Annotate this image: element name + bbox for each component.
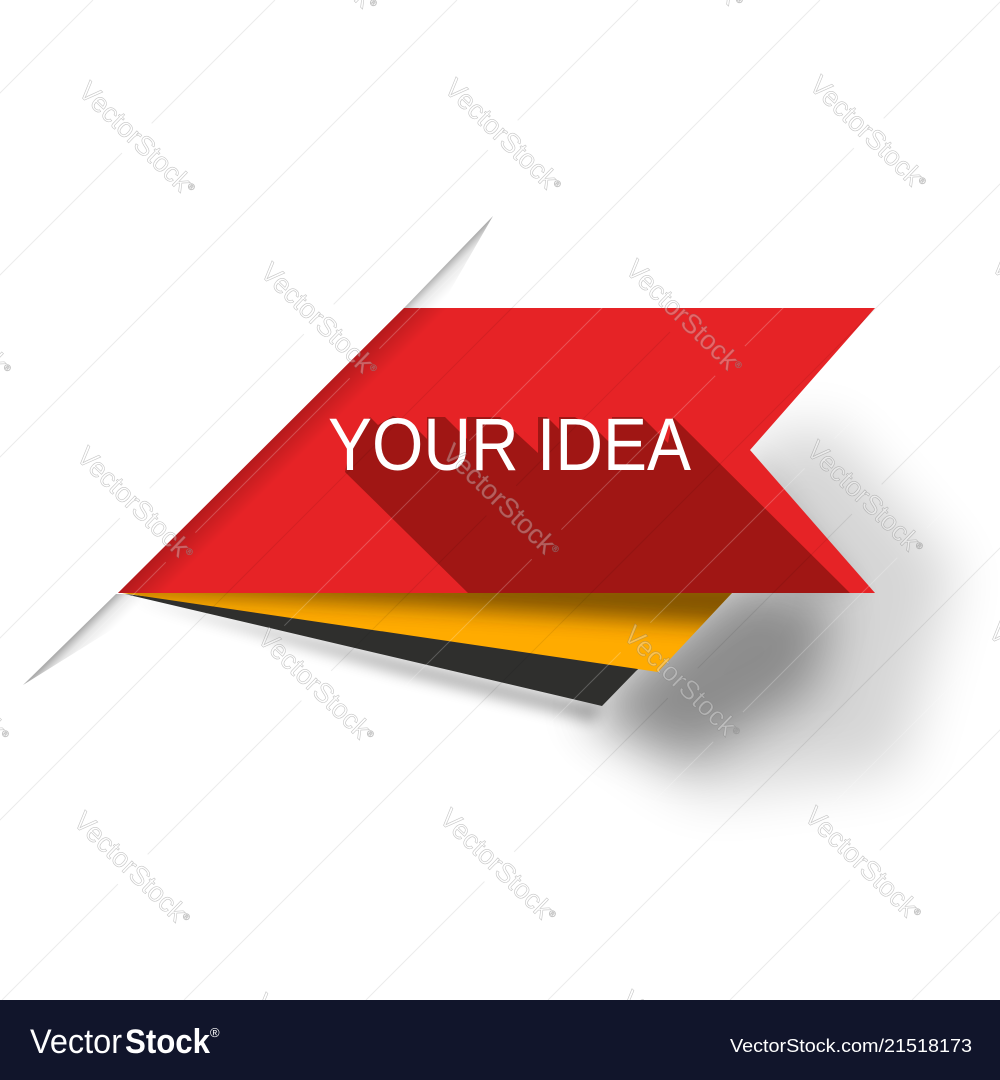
watermark stamps: VectorStock [437, 438, 561, 559]
watermark stamps: VectorStock [434, 803, 558, 924]
footer logo: Stock [125, 1023, 210, 1061]
watermark stamps: VectorStock [801, 435, 925, 556]
watermark stamps: VectorStock [252, 623, 376, 744]
soft drop shadow [580, 425, 955, 795]
watermark stamps: ® [181, 911, 192, 923]
watermark stamps: ® [914, 540, 925, 552]
paper slit shadow upper [404, 216, 493, 308]
watermark stamps: ® [550, 543, 561, 555]
yellow paper layer [122, 593, 732, 672]
footer logo [30, 1023, 220, 1061]
watermark stamps: ® [2, 362, 13, 374]
watermark stamps: ® [368, 362, 379, 374]
watermark stamps: VectorStock [620, 254, 744, 375]
watermark stamps: ® [912, 906, 923, 918]
ribbon folded edge shading [118, 308, 455, 593]
watermark stamps: ® [365, 728, 376, 740]
watermark stamps: ® [552, 178, 563, 190]
watermark stamps: VectorStock [255, 257, 379, 378]
footer bar [0, 1000, 1000, 1080]
footer logo: Vector [30, 1023, 122, 1061]
dark paper layer [125, 594, 660, 706]
red ribbon banner [118, 308, 875, 593]
watermark stamps: VectorStock [799, 801, 923, 922]
footer logo: ® [210, 1025, 220, 1040]
watermark stamps: ® [547, 908, 558, 920]
watermark stamps: ® [184, 546, 195, 558]
heading: your idea: YOUR IDEA [328, 403, 692, 486]
watermark stamps: ® [186, 181, 197, 193]
shadow under dark paper [130, 597, 602, 722]
footer url and id: VectorStock.com/21518173 [730, 1035, 972, 1056]
paper slit shadow lower [23, 594, 165, 685]
watermark stamps: ® [917, 175, 928, 187]
long text shadow [345, 416, 850, 593]
watermark stamps: ® [733, 359, 744, 371]
watermark stamps: VectorStock [618, 620, 742, 741]
watermark stamps: VectorStock [73, 76, 197, 197]
watermark stamps: VectorStock [71, 441, 195, 562]
watermark stamps: VectorStock [804, 70, 928, 191]
watermark stamps: ® [731, 725, 742, 737]
watermark stamps: VectorStock [439, 73, 563, 194]
watermark stamps: VectorStock [68, 806, 192, 927]
